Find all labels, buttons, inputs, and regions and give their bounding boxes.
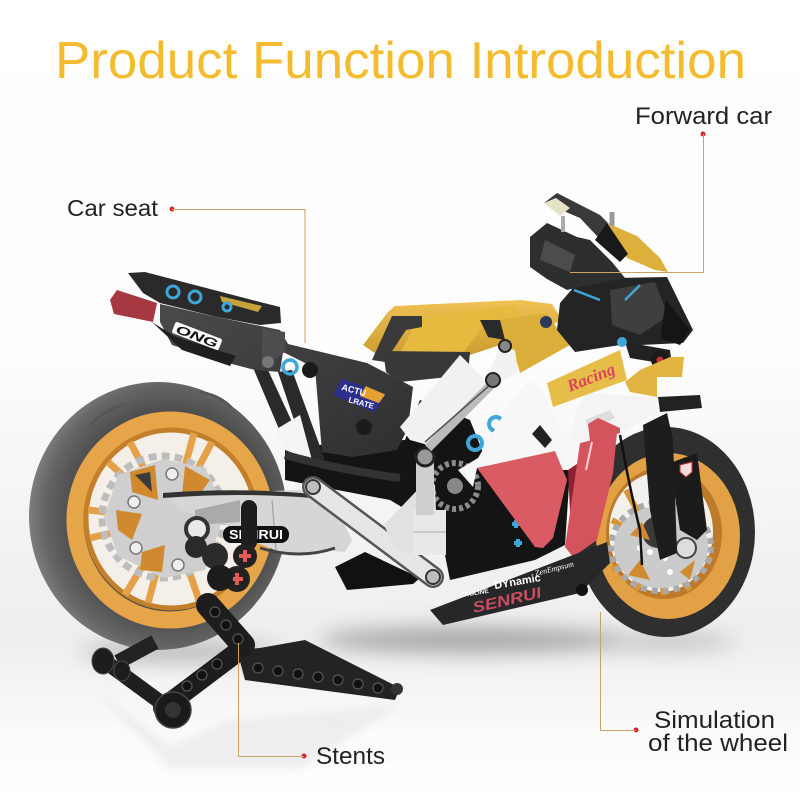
brand sticker: ONG: [174, 322, 220, 351]
front spokes: [612, 490, 712, 595]
swingarm: [163, 490, 420, 592]
upper cockpit block: [530, 193, 668, 290]
belly pan: TAGLINE: [460, 588, 490, 599]
fuel tank: [363, 300, 570, 382]
belly pan: DYnamic: [493, 572, 542, 592]
callout: stents: [238, 643, 385, 770]
motorcycle: [29, 193, 755, 728]
fork badge: [680, 462, 692, 477]
sticker: LRATE: [347, 395, 376, 411]
callout: forward car: [570, 103, 772, 272]
title: Product Function Introduction: [55, 32, 746, 90]
red triangular panel: [477, 451, 567, 548]
front fairing: Racing: [563, 359, 618, 396]
diagonal frame tube: [306, 448, 446, 584]
tail top: [128, 272, 281, 325]
tail light: [110, 290, 157, 322]
red lower panel: [565, 433, 617, 557]
sticker: [332, 378, 386, 414]
sticker: ACTU: [340, 382, 367, 398]
front fork: [620, 413, 707, 565]
stand: [92, 605, 403, 728]
blue details: [167, 286, 231, 311]
rear tail and seat: [110, 272, 413, 457]
rear spokes: [88, 433, 230, 603]
floor shadow: [80, 627, 735, 770]
brand sticker: [171, 321, 223, 352]
rear wheel: [29, 382, 287, 650]
white upper frame panel: [400, 340, 518, 448]
rear brake disc: [102, 456, 226, 578]
blue pin: [283, 360, 297, 374]
pivot links: [241, 500, 257, 550]
swingarm badge: [223, 526, 289, 543]
windscreen: [544, 193, 625, 252]
belly pan: [430, 542, 610, 625]
callout: stents: Stents: [316, 743, 385, 770]
callout: car seat: Car seat: [67, 195, 159, 221]
black front mechanics: [557, 277, 693, 369]
belly pan: SENRUI: [471, 584, 544, 617]
swingarm badge: SENRUI: [229, 527, 283, 542]
front brake disc: [611, 503, 711, 591]
black mechanical frame: [254, 370, 590, 580]
callout: car seat: [67, 195, 305, 343]
yellow right cowl: [625, 357, 684, 397]
callout: simulation of the wheel: Simulation: [654, 707, 775, 734]
white side panel: [458, 380, 572, 487]
callout: simulation of the wheel: [600, 612, 788, 757]
tail body: [160, 304, 413, 457]
gear: [432, 463, 478, 509]
yellow racing panel: [547, 350, 627, 407]
belly pan: ZenEmpsum: [534, 559, 575, 578]
callout: simulation of the wheel: of the wheel: [648, 730, 788, 757]
front wheel: [577, 427, 755, 637]
front fairing: [458, 350, 702, 557]
callout: forward car: Forward car: [635, 103, 772, 130]
mirror and handlebar: [625, 342, 672, 365]
blue pins: [468, 417, 503, 450]
white lower front: [570, 393, 657, 443]
